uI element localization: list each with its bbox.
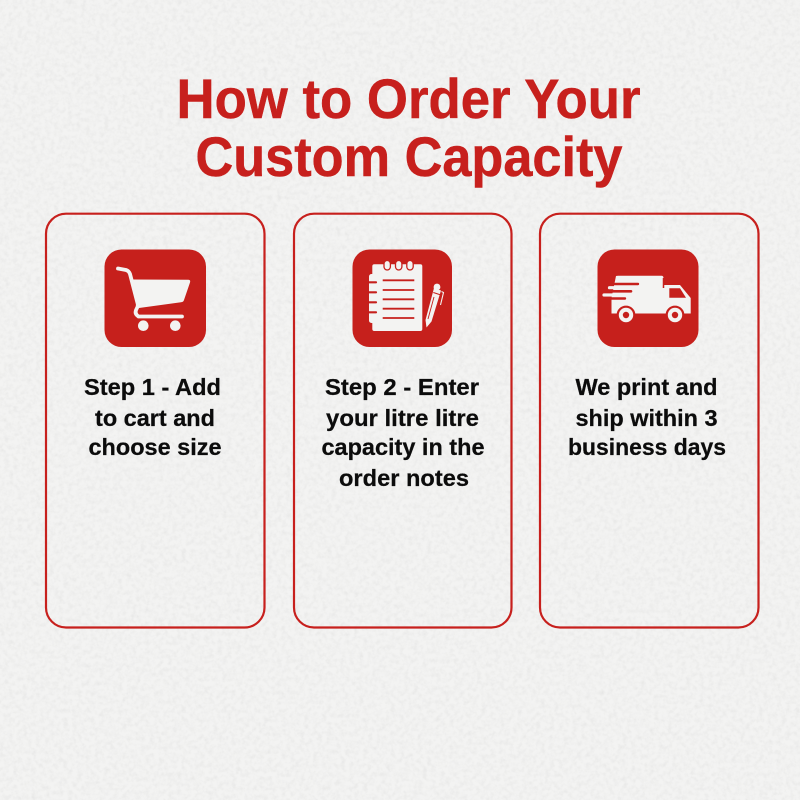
title: How to Order Your [176, 67, 640, 130]
text: step 1 [84, 374, 222, 460]
text: step 3: business days [568, 434, 726, 460]
text: step 2 [322, 374, 484, 491]
text: step 3: We print and [576, 374, 718, 400]
text: step 1: to cart and [95, 405, 215, 431]
text: step 2: Step 2 - Enter [325, 374, 479, 400]
panel: step 1 [46, 214, 264, 627]
text: step 2: order notes [339, 465, 469, 491]
panel: step 3 [540, 214, 758, 627]
text: step 3 [568, 374, 726, 460]
panel: step 2 [294, 214, 512, 627]
icon: shopping cart [104, 250, 206, 347]
icon: delivery truck [598, 250, 698, 347]
title: Custom Capacity [196, 125, 622, 188]
text: step 3: ship within 3 [576, 405, 718, 431]
text: step 2: your litre litre [326, 405, 479, 431]
icon: notepad and pen [352, 250, 452, 347]
text: step 1: Step 1 - Add [84, 374, 221, 400]
text: step 1: choose size [88, 434, 222, 460]
text: step 2: capacity in the [322, 434, 484, 460]
title [176, 67, 640, 188]
